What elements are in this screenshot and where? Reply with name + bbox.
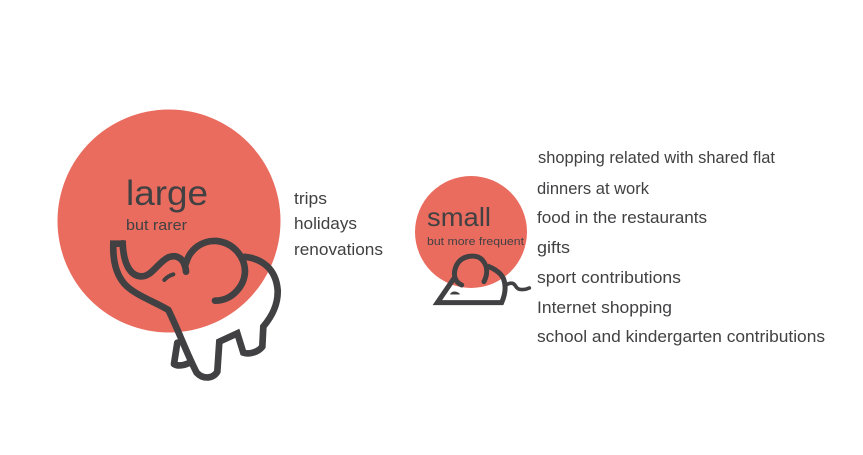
item: gifts: gifts [537,239,570,257]
item: dinners at work: dinners at work [537,180,650,198]
item: Internet shopping: Internet shopping [537,299,672,317]
heading: large: large [126,174,208,213]
list: large expense items [294,190,383,259]
panel: small expenses [415,176,529,303]
icon: elephant [110,241,278,377]
item: trips: trips [294,190,327,208]
item: holidays: holidays [294,215,357,233]
item: renovations: renovations [294,241,383,259]
list: small expense items [537,149,825,346]
subheading: but rarer: but rarer [126,218,187,234]
icon: mouse [437,256,529,303]
item: school and kindergarten contributions: school and kindergarten contributions [537,328,825,346]
item: food in the restaurants: food in the restaurants [537,209,707,227]
subheading: but more frequent: but more frequent [427,236,524,248]
panel: large expenses [58,110,280,377]
item: shopping related with shared flat: shopping related with shared flat [538,149,775,167]
large circle [58,110,280,332]
small circle [415,176,527,288]
heading: small: small [427,202,491,232]
item: sport contributions: sport contributions [537,269,681,287]
